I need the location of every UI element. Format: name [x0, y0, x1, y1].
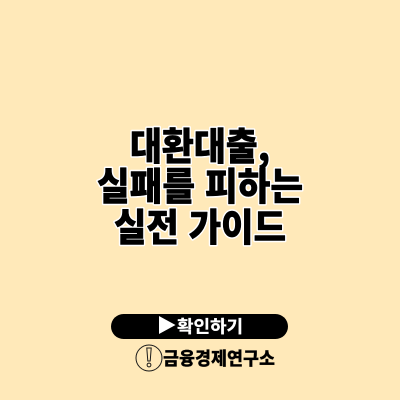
- title: 실패를 피하는: [97, 156, 303, 211]
- title: 실패를 피하는: [97, 156, 303, 211]
- title: 실전 가이드: [114, 197, 286, 252]
- brand name: 금융경제연구소: [163, 345, 275, 371]
- brand: 금융경제연구소: [136, 345, 275, 371]
- title: 실전 가이드: [114, 197, 286, 252]
- button: 확인하기: 확인하기: [177, 312, 243, 338]
- title: [97, 116, 303, 252]
- button: 확인하기: [111, 312, 288, 339]
- icon: exclamation mark in circle: [136, 345, 162, 371]
- title: 대환대출,: [130, 116, 270, 171]
- title: 대환대출,: [130, 116, 270, 171]
